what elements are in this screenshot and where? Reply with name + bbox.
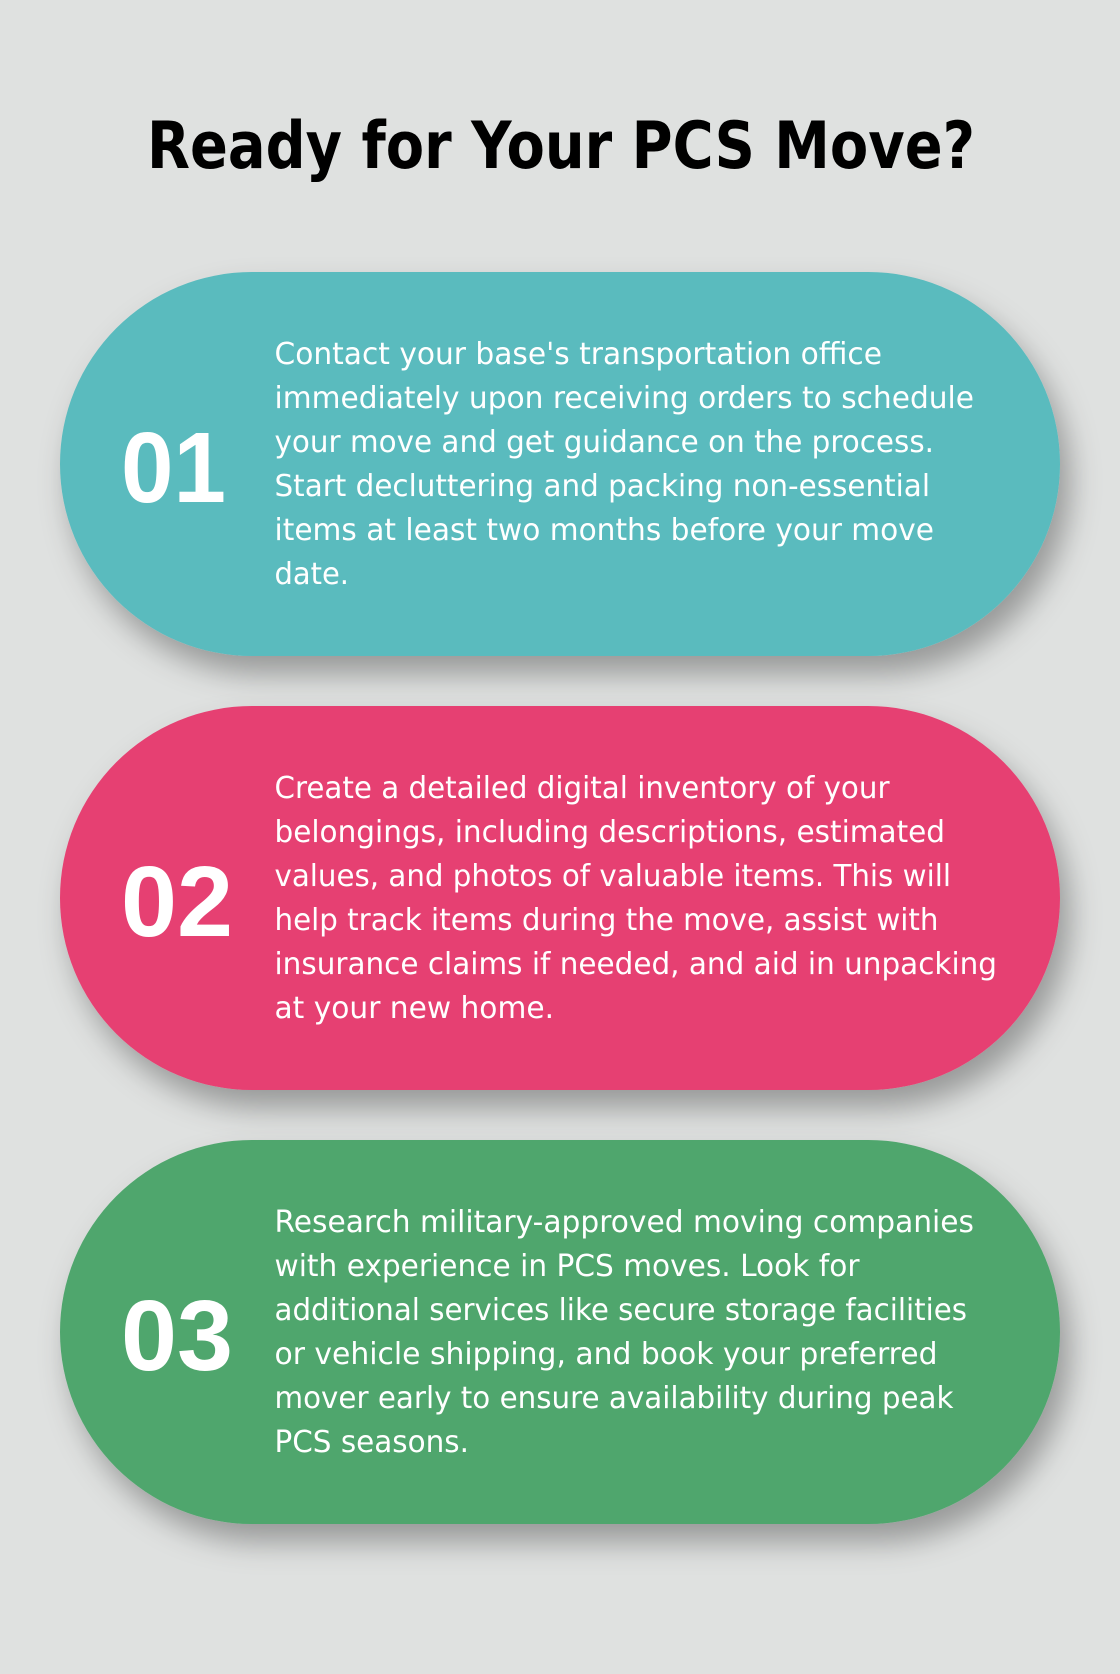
step 01 text: items at least two months before your move bbox=[274, 513, 934, 548]
panel: step 02 bbox=[60, 706, 1060, 1090]
pill background: pink bbox=[60, 706, 1060, 1090]
step 02 text: at your new home. bbox=[274, 991, 554, 1026]
step 02 text: insurance claims if needed, and aid in unpacking bbox=[274, 947, 997, 982]
step number 01: 01 bbox=[121, 412, 226, 524]
step number 03: 03 bbox=[121, 1280, 233, 1392]
step 02 text: values, and photos of valuable items. This will bbox=[274, 859, 951, 894]
step number 02: 02 bbox=[121, 846, 233, 958]
step 03 text: or vehicle shipping, and book your preferred bbox=[274, 1337, 938, 1372]
panel: step 03 bbox=[60, 1140, 1060, 1524]
step 01 text bbox=[274, 337, 974, 592]
step 02 text: Create a detailed digital inventory of your bbox=[274, 771, 890, 806]
step 03 text: additional services like secure storage facilities bbox=[274, 1293, 967, 1328]
pill background: teal bbox=[60, 272, 1060, 656]
step 03 text bbox=[274, 1205, 974, 1460]
title: Ready for Your PCS Move? bbox=[147, 109, 975, 184]
step 03 text: with experience in PCS moves. Look for bbox=[274, 1249, 860, 1284]
step 03 text: PCS seasons. bbox=[274, 1425, 469, 1460]
step 02 text: help track items during the move, assist with bbox=[274, 903, 938, 938]
step 01 text: date. bbox=[274, 557, 349, 592]
step 02 text bbox=[274, 771, 997, 1026]
step 01 text: Start decluttering and packing non-essential bbox=[274, 469, 930, 504]
step 03 text: Research military-approved moving companies bbox=[274, 1205, 974, 1240]
pill background: green bbox=[60, 1140, 1060, 1524]
step 01 text: immediately upon receiving orders to schedule bbox=[274, 381, 974, 416]
step 03 text: mover early to ensure availability during peak bbox=[274, 1381, 954, 1416]
step 01 text: Contact your base's transportation office bbox=[274, 337, 882, 372]
step 02 text: belongings, including descriptions, estimated bbox=[274, 815, 945, 850]
step 01 text: your move and get guidance on the process. bbox=[274, 425, 934, 460]
panel: step 01 bbox=[60, 272, 1060, 656]
